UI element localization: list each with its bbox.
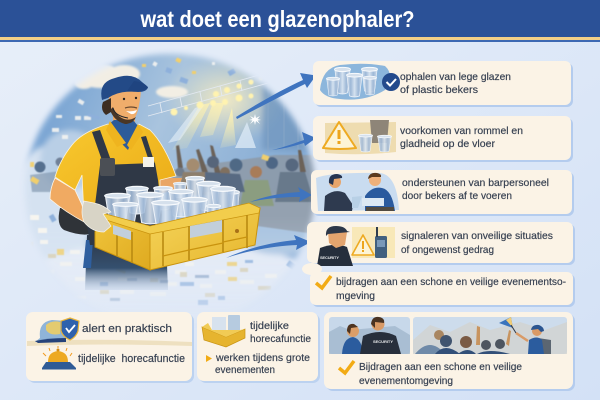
text: [250, 320, 311, 345]
text: tijdelijke horecafunctie: [78, 353, 185, 365]
card: signaleren van onveilige situaties: [307, 222, 575, 266]
text: alert en praktisch: [82, 323, 172, 335]
text: [215, 352, 310, 376]
icon: warning sign, bin and cups: [323, 120, 396, 154]
arrow: to card 3: [250, 187, 312, 202]
text: evenementen: [215, 364, 275, 376]
icon: security guard with radio: [317, 226, 395, 266]
text: ophalen van lege glazen: [400, 71, 511, 83]
crate: [95, 213, 150, 270]
icon: worker and bartender: [316, 173, 399, 211]
illustration: festival scene: [26, 50, 317, 305]
text: voorkomen van rommel en: [400, 125, 523, 137]
face: [109, 80, 141, 122]
text: [402, 177, 549, 202]
illustration: worker with crate of cups: [50, 76, 260, 290]
icon: security guard with radio: SECURITY: [320, 255, 339, 260]
image: crowd and flag: [413, 317, 567, 354]
text: [400, 71, 511, 96]
text: mgeving: [336, 290, 375, 302]
text: [359, 361, 522, 387]
icon: service bell: [42, 346, 76, 370]
text: of ongewenst gedrag: [401, 244, 494, 256]
text: Bijdragen aan een schone en veilige: [359, 361, 522, 373]
neck: [113, 112, 135, 130]
text: horecafunctie: [250, 333, 311, 345]
confetti: [28, 57, 296, 305]
icon: check mark: [316, 276, 331, 288]
card: ophalen van lege glazen: [313, 61, 573, 107]
icon: stacked cups with check: [320, 64, 400, 100]
image: security staff: SECURITY: [373, 339, 393, 344]
card: tijdelijke horecafunctie, werken tijdens grote evenementen: [197, 312, 320, 383]
text: werken tijdens grote: [215, 352, 310, 364]
text: [400, 125, 523, 150]
text: [401, 230, 553, 256]
title: wat doet een glazenophaler?: [140, 6, 414, 32]
text: tijdelijke: [250, 320, 289, 332]
text: [336, 276, 566, 302]
card: voorkomen van rommel: [313, 116, 573, 162]
text: evenementomgeving: [359, 375, 453, 387]
glove: [82, 201, 111, 232]
icon: bullet triangle: [206, 355, 212, 362]
crowd: [30, 145, 322, 235]
stage lights and truss: [148, 72, 298, 150]
radio on strap: [100, 158, 115, 176]
image: security staff: [329, 317, 410, 354]
card: ondersteunen van barpersoneel: [311, 170, 574, 216]
card: alert en praktisch, tijdelijke horecafunctie: [26, 312, 194, 383]
shirt: [55, 124, 176, 215]
text: ondersteunen van barpersoneel: [402, 177, 549, 189]
cap: [101, 76, 148, 100]
cups: [105, 176, 240, 230]
icon: check mark: [339, 361, 354, 373]
card: bijdragen aan een schone en veilige evenementsomgeving: [302, 263, 575, 307]
backpack: [59, 205, 100, 235]
arrow: to card 1: [236, 73, 316, 119]
text: bijdragen aan een schone en veilige evenementso-: [336, 276, 566, 288]
collar: [109, 120, 138, 150]
text: door bekers af te voeren: [402, 190, 512, 202]
arms: [50, 178, 86, 223]
apron and straps: [85, 130, 162, 245]
arrow: to card 2: [272, 132, 316, 150]
clouds: [74, 64, 189, 99]
card: security en publiek: [324, 312, 575, 391]
icon: box with cups and plates: [202, 315, 245, 347]
text: signaleren van onveilige situaties: [401, 230, 553, 242]
header banner: [0, 0, 600, 42]
badge: [143, 157, 154, 167]
text: of plastic bekers: [400, 84, 478, 96]
arrow: to card 4: [226, 235, 311, 258]
icon: cap with shield: [35, 318, 79, 343]
trousers: [85, 235, 168, 290]
text: gladheid op de vloer: [400, 138, 495, 150]
